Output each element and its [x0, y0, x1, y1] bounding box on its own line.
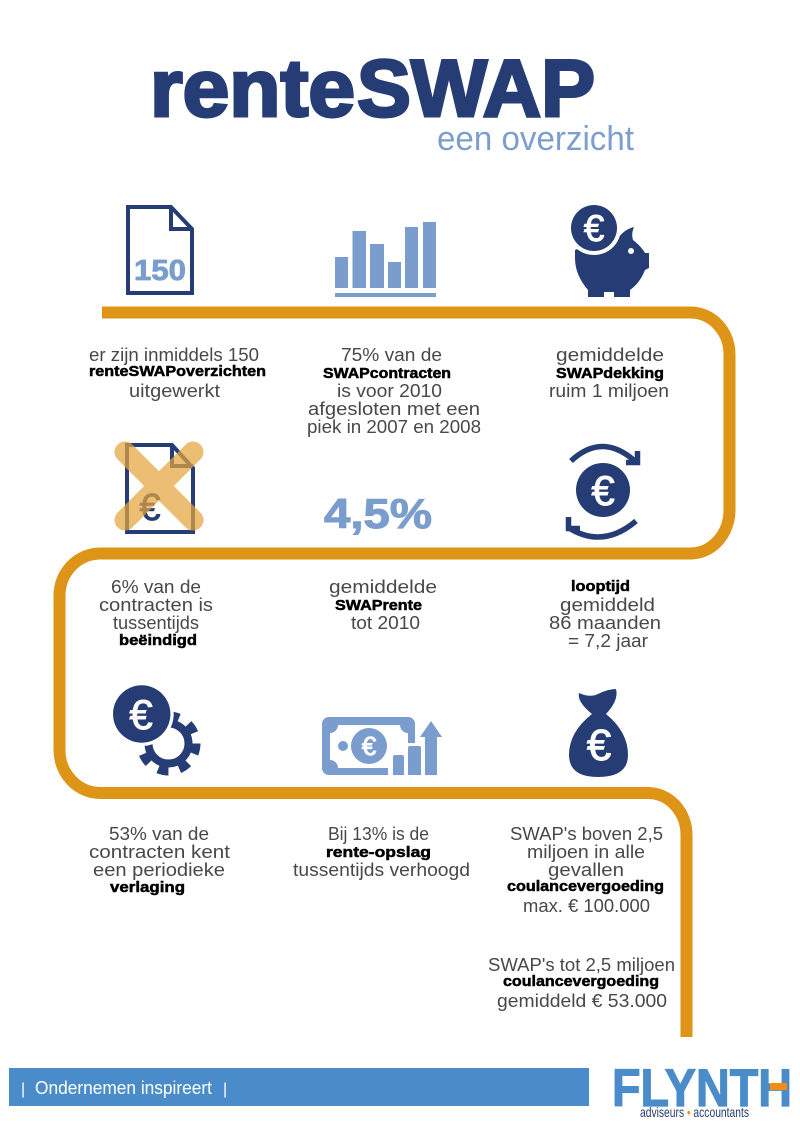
icon: cancelled contract: €	[139, 487, 161, 529]
text: 13% rente-opslag	[293, 824, 470, 880]
text: 53% verlaging: verlaging	[110, 879, 185, 896]
text: 53% verlaging	[89, 824, 230, 896]
text: 150 overzichten: renteSWAPoverzichten	[89, 363, 266, 380]
title: rente	[150, 44, 355, 134]
title	[150, 44, 595, 134]
text: 150 overzichten: er zijn inmiddels 150	[89, 345, 259, 365]
text: SWAPdekking: SWAPdekking	[556, 365, 664, 382]
text: 75% van de contracten: is voor 2010	[337, 381, 442, 401]
icon: banknote with rising bars: €	[362, 731, 377, 761]
text: 75% van de contracten: 75% van de	[341, 345, 442, 365]
text: 6% beeindigd: beëindigd	[119, 632, 197, 649]
text: SWAPrente: gemiddelde	[329, 577, 437, 597]
text: 6% beeindigd	[99, 577, 213, 649]
icon: document 150	[128, 207, 192, 293]
icon: money bag: €	[587, 721, 611, 770]
text: 53% verlaging: 53% van de	[109, 824, 209, 844]
text: boven 2,5 miljoen: SWAP's boven 2,5	[510, 824, 663, 844]
text: 75% van de contracten: SWAPcontracten	[323, 365, 451, 382]
winding timeline path	[60, 312, 730, 1037]
footer banner: |	[21, 1081, 25, 1098]
icon: euro coin and gear: €	[129, 691, 153, 738]
text: SWAPrente: tot 2010	[351, 613, 420, 633]
text: looptijd: 86 maanden	[549, 613, 661, 633]
icon: money bag	[569, 689, 628, 777]
text: 150 overzichten	[89, 345, 266, 401]
text: SWAPrente: SWAPrente	[335, 597, 422, 614]
footer banner: Ondernemen inspireert	[35, 1078, 212, 1098]
icon: bar chart	[335, 222, 436, 297]
icon: euro cycle: €	[591, 467, 615, 514]
text: tot 2,5 miljoen: coulancevergoeding	[503, 973, 659, 990]
text: boven 2,5 miljoen: coulancevergoeding	[507, 878, 664, 895]
text: looptijd	[549, 578, 661, 651]
text: 75% van de contracten: afgesloten met een	[308, 399, 480, 419]
text: boven 2,5 miljoen: miljoen in alle	[527, 842, 645, 862]
icon: euro cycle	[568, 446, 638, 537]
text: 13% rente-opslag: tussentijds verhoogd	[293, 860, 470, 880]
icon: euro coin and gear	[110, 682, 196, 771]
text: 13% rente-opslag: rente-opslag	[326, 844, 431, 861]
icon: piggy bank: €	[584, 208, 605, 249]
text: 6% beeindigd: contracten is	[99, 595, 213, 615]
big number 4,5%: 4,5%	[324, 490, 432, 537]
text: tot 2,5 miljoen	[488, 955, 675, 1011]
text: boven 2,5 miljoen: max. € 100.000	[523, 896, 650, 916]
footer banner: |	[223, 1081, 227, 1098]
text: tot 2,5 miljoen: SWAP's tot 2,5 miljoen	[488, 955, 675, 975]
text: 150 overzichten: uitgewerkt	[129, 381, 220, 401]
text: 75% van de contracten	[307, 345, 481, 437]
text: 53% verlaging: contracten kent	[89, 842, 230, 862]
text: SWAPdekking: ruim 1 miljoen	[549, 381, 669, 401]
icon: document 150: 150	[134, 255, 186, 287]
text: SWAPdekking	[549, 345, 669, 401]
icon: banknote with rising bars	[322, 717, 444, 780]
text: 13% rente-opslag: Bij 13% is de	[328, 824, 429, 844]
title: SWAP	[357, 44, 595, 134]
text: boven 2,5 miljoen	[507, 824, 664, 916]
text: boven 2,5 miljoen: gevallen	[548, 860, 624, 880]
footer banner	[9, 1068, 589, 1106]
text: tot 2,5 miljoen: gemiddeld € 53.000	[497, 991, 667, 1011]
text: 6% beeindigd: tussentijds	[113, 613, 199, 633]
icon: piggy bank	[567, 201, 649, 297]
text: SWAPdekking: gemiddelde	[556, 345, 664, 365]
text: 75% van de contracten: piek in 2007 en 2008	[307, 417, 481, 437]
text: looptijd: looptijd	[571, 578, 630, 595]
icon: cancelled contract	[125, 445, 193, 532]
text: SWAPrente	[329, 577, 437, 633]
subtitle: een overzicht	[437, 120, 635, 158]
text: looptijd: gemiddeld	[560, 595, 655, 615]
text: looptijd: = 7,2 jaar	[568, 631, 648, 651]
text: 53% verlaging: een periodieke	[93, 860, 225, 880]
text: 6% beeindigd: 6% van de	[111, 577, 201, 597]
logo: FLYNTH: adviseurs • accountants	[640, 1104, 749, 1120]
